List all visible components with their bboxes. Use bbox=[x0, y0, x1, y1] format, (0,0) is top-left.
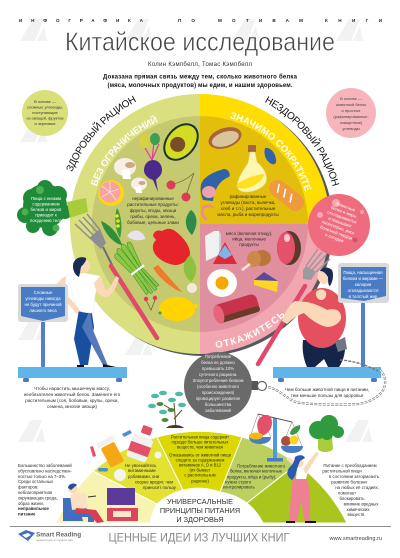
logo: ценные идеи из лучших книг bbox=[36, 538, 73, 542]
icon: red pepper bbox=[153, 229, 190, 265]
circle: healthy diet note: В основе — bbox=[34, 99, 56, 104]
text: control protein: контролировать bbox=[223, 484, 256, 490]
text: plant diet: помогает bbox=[338, 490, 356, 496]
icon: small berries bbox=[144, 296, 157, 310]
sector: vitamins bbox=[93, 437, 183, 504]
text: heredity: ностью только на 7–3%. bbox=[18, 474, 66, 479]
panel: plate bbox=[70, 94, 333, 356]
lead text bbox=[103, 74, 298, 89]
text: heredity: Среди остальных bbox=[18, 479, 54, 484]
sausage slice with note: Животные bbox=[335, 201, 357, 213]
icon: shrimp bbox=[202, 206, 213, 219]
icon: salami bbox=[211, 293, 261, 325]
sign: left scale: лишнего веса bbox=[29, 308, 57, 313]
weight: protein note: Злоупотребление белком bbox=[193, 378, 243, 383]
icon: cherries bbox=[166, 173, 194, 202]
header line bbox=[19, 18, 382, 23]
text: plant diet: на любых её стадиях, bbox=[335, 485, 379, 490]
text: vitamins: витаминными bbox=[128, 468, 156, 473]
text: heredity: образ жизни, bbox=[18, 501, 44, 506]
text: plant food: (их бывает bbox=[189, 468, 211, 472]
icon: carrot bbox=[153, 265, 182, 292]
text: plant food: Отказываясь от животной пищи bbox=[169, 452, 232, 458]
text: plant diet: растительной пищи bbox=[322, 468, 362, 474]
header line: КНИГИ bbox=[325, 18, 382, 23]
right fork bbox=[258, 249, 330, 364]
icon: tv bbox=[107, 488, 138, 521]
sector: plant food bbox=[157, 431, 242, 492]
text: heredity: питание bbox=[18, 512, 36, 517]
footer url: www.smartreading.ru bbox=[328, 536, 382, 542]
header line: МОТИВАМ bbox=[218, 18, 303, 23]
text: muscle mass: семена, многие овощи) bbox=[47, 404, 97, 409]
circle: unhealthy diet note bbox=[326, 88, 376, 138]
text: muscle mass bbox=[24, 386, 121, 409]
circle: healthy diet note bbox=[22, 90, 68, 136]
broccoli with note: похудению тела bbox=[30, 218, 63, 223]
sausage slice with note: и повышают bbox=[328, 216, 352, 229]
label: no limits: БЕЗ ОГРАНИЧЕНИЙ bbox=[90, 114, 158, 186]
weight: protein note: Потребление bbox=[205, 354, 232, 359]
header line: ПО bbox=[178, 18, 195, 23]
sign: left scale: углеводы никогда bbox=[25, 296, 61, 301]
text: plant diet: влияние вредных bbox=[344, 502, 379, 506]
woman figure bbox=[282, 268, 347, 367]
icon: man watching tv bbox=[63, 484, 104, 523]
text: plant diet bbox=[322, 463, 380, 517]
weight: protein note: происхождения) bbox=[202, 390, 235, 395]
icon: chicken leg bbox=[242, 250, 271, 270]
sausage slice with note: болезней сердца bbox=[319, 224, 354, 241]
broccoli with note: белков и жиров bbox=[31, 207, 62, 212]
title: Китайское исследование bbox=[65, 26, 335, 56]
circle: unhealthy diet note: и простые bbox=[342, 108, 361, 113]
icon: broccoli stalk on fork bbox=[67, 198, 88, 218]
text: vitamins bbox=[125, 463, 177, 490]
text: control protein: продукты, яйца и (рыбу), bbox=[227, 474, 276, 480]
icon: bread bbox=[206, 123, 244, 153]
text: plant diet: блокировать bbox=[339, 496, 365, 501]
icon: fried egg bbox=[207, 269, 237, 297]
text: heredity: неправильное bbox=[18, 506, 49, 511]
circle: healthy diet note: сложные углеводы, bbox=[27, 104, 63, 110]
icon: mushroom small bbox=[187, 283, 197, 293]
text: refined foods: углеводы (паста, выпечка, bbox=[220, 200, 276, 205]
text: plant food bbox=[169, 434, 232, 484]
sign: right scale: Пища, насыщенная bbox=[343, 270, 383, 275]
text: muscle mass: необязателен животный белок. Замените его bbox=[24, 391, 121, 397]
circle: unhealthy diet note: В основе — bbox=[340, 96, 362, 101]
weight: protein note: (особенно животного bbox=[197, 384, 240, 389]
text: vitamins: добавками, они bbox=[128, 474, 160, 479]
left fork bbox=[75, 214, 157, 338]
text: unrefined foods bbox=[127, 196, 179, 225]
text: plant diet: веществ bbox=[348, 512, 365, 517]
text: plant food: витаминов А, D и B12 bbox=[179, 462, 222, 468]
sausage slice with note: и сосудов bbox=[324, 232, 345, 244]
sign: right scale bbox=[338, 263, 389, 368]
sector: plant diet bbox=[247, 464, 347, 523]
icon: steak bbox=[277, 231, 301, 265]
text: plant food: веществ, чем животная bbox=[177, 444, 223, 450]
fan heading bbox=[160, 497, 240, 524]
icon: pills bbox=[90, 430, 162, 481]
footer slogan: ЦЕННЫЕ ИДЕИ ИЗ ЛУЧШИХ КНИГ bbox=[108, 532, 290, 544]
text: unrefined foods: нерафинированные bbox=[132, 196, 174, 201]
text: plant diet: Питание с преобладанием bbox=[323, 463, 377, 468]
icon: sausage fish bbox=[201, 169, 230, 201]
text: refined foods: хлеб и т.п.), растительные bbox=[221, 206, 276, 211]
text: heredity: неблагоприятная bbox=[18, 490, 53, 495]
weight: protein note: провоцирует развитие bbox=[196, 396, 241, 401]
sign: left scale: Сложные bbox=[34, 290, 53, 295]
weight: protein note: белка не должно bbox=[201, 360, 235, 365]
fan heading: УНИВЕРСАЛЬНЫЕ bbox=[167, 497, 233, 506]
text: plant diet: химических bbox=[346, 507, 370, 512]
text: plant food: гораздо больше питательных bbox=[171, 440, 229, 444]
icon: mushrooms bbox=[114, 158, 147, 193]
text: animal food harm: Чем больше животной пищи в питании, bbox=[285, 386, 369, 392]
authors: Колин Кэмпбелл, Томас Кэмпбелл bbox=[148, 62, 252, 68]
man figure bbox=[55, 257, 119, 367]
platform: right scale bbox=[273, 367, 381, 382]
text: plant diet: в состоянии затормозить bbox=[329, 474, 380, 479]
lead text: Доказана прямая связь между тем, сколько животного белка bbox=[103, 74, 298, 80]
text: muscle mass: растительным (соя, бобовые, крупы, орехи, bbox=[25, 398, 119, 403]
text: plant food: Растительная пища содержит bbox=[171, 434, 229, 440]
text: control protein: белка, включая молочные bbox=[230, 468, 283, 474]
text: control protein: Потребление животного bbox=[237, 464, 286, 468]
weight: protein note: суточного рациона. bbox=[199, 372, 237, 377]
sausage slice with note bbox=[308, 194, 370, 256]
sausage slice with note: откладываются bbox=[327, 209, 358, 225]
broccoli with note: приводит к bbox=[35, 212, 57, 218]
icon: garlic bbox=[127, 231, 145, 240]
icon: pea pod bbox=[101, 208, 122, 245]
sector: control protein bbox=[220, 437, 297, 503]
logo: Smart Reading bbox=[36, 532, 81, 538]
text: heredity: окружающая среда, bbox=[18, 495, 58, 500]
icon: balance scale bbox=[249, 414, 303, 462]
label: unhealthy diet: НЕЗДОРОВЫЙ РАЦИОН bbox=[265, 96, 340, 186]
weight: protein note: большинства bbox=[205, 402, 232, 407]
circle: healthy diet note: из овощей, фруктов bbox=[26, 116, 64, 120]
text: vitamins: Не увлекайтесь bbox=[125, 463, 157, 468]
text: animal food harm bbox=[285, 386, 369, 398]
icon: cheese bbox=[254, 272, 278, 292]
text: refined foods bbox=[217, 194, 279, 217]
icon: beet bbox=[139, 133, 162, 192]
icon: grapefruit bbox=[98, 180, 124, 206]
text: unrefined foods: фрукты, ягоды, овощи bbox=[130, 208, 177, 213]
text: heredity: обусловлено наследствен- bbox=[18, 468, 72, 473]
text: meat and dairy: яйца, молочные bbox=[232, 236, 266, 242]
sign: right scale: в толстый жир bbox=[349, 294, 378, 299]
label: refuse: ОТКАЖИТЕСЬ bbox=[216, 313, 284, 348]
sign: right scale: откладываются bbox=[348, 288, 379, 293]
text: meat and dairy: мясо (включая птицу), bbox=[226, 231, 272, 236]
text: refined foods: рафинированные bbox=[230, 194, 267, 199]
text: plant diet: развитие болезни bbox=[331, 480, 367, 484]
text: plant food: рационе) bbox=[191, 478, 209, 484]
icon: asparagus bunch bbox=[111, 239, 163, 298]
weight: protein note bbox=[184, 352, 266, 420]
text: heredity: факторов: bbox=[18, 485, 38, 490]
broccoli with note bbox=[17, 180, 72, 236]
sign: left scale: не будут причиной bbox=[24, 302, 62, 307]
header line: ИНФОГРАФИКА bbox=[19, 18, 144, 23]
chain bbox=[268, 360, 385, 405]
circle: healthy diet note: и зерновых bbox=[34, 121, 56, 126]
text: vitamins: скорее вредят, чем bbox=[135, 480, 173, 484]
text: animal food harm: тем меньше пользы для здоровья bbox=[291, 393, 364, 398]
icon: leaf small bbox=[184, 255, 196, 282]
icon: blue snack bbox=[264, 148, 276, 164]
text: refined foods: масла, рыба и морепродукты bbox=[217, 212, 279, 217]
text: muscle mass: Чтобы нарастить мышечную массу, bbox=[34, 386, 110, 391]
icon: milk carton bbox=[205, 231, 221, 261]
fan heading: И ЗДОРОВЬЯ bbox=[176, 515, 224, 524]
sign: right scale: белком и жирами — bbox=[343, 276, 384, 281]
text: heredity bbox=[18, 463, 72, 517]
label: healthy diet: ЗДОРОВЫЙ РАЦИОН bbox=[66, 96, 136, 172]
circle: unhealthy diet note: животный белок bbox=[336, 102, 366, 107]
sign: left scale bbox=[18, 284, 68, 368]
panel: principles fan bbox=[56, 431, 347, 523]
text: meat and dairy: продукты bbox=[239, 242, 259, 247]
icon: plant bbox=[148, 391, 186, 428]
weight: protein note: заболеваний bbox=[205, 408, 232, 413]
text: control protein: нужно строго bbox=[225, 480, 252, 484]
broccoli with note: Пища с низким bbox=[31, 196, 61, 201]
icon: pill bottle orange bbox=[96, 435, 126, 469]
circle: healthy diet note: поступающие bbox=[32, 110, 58, 115]
icon: triangle pack bbox=[213, 242, 237, 264]
icon: avocado bbox=[156, 116, 206, 168]
text: vitamins: приносят пользу bbox=[143, 485, 177, 490]
text: plant food: с растительным bbox=[184, 472, 216, 478]
sign: right scale: калории bbox=[355, 282, 372, 287]
circle: unhealthy diet note: очищенные) bbox=[340, 120, 363, 125]
platform: left scale bbox=[18, 367, 127, 382]
text: unrefined foods: бобовые, цельные злаки bbox=[127, 220, 179, 225]
icon: large broccoli bbox=[309, 415, 344, 452]
woman with broccoli bbox=[286, 452, 319, 523]
icon: leaf bbox=[186, 210, 196, 235]
sausage slice with note: холестерин, риск bbox=[321, 219, 355, 236]
sector: heredity bbox=[56, 471, 157, 523]
lead text: (мяса, молочных продуктов) мы едим, и нашим здоровьем. bbox=[108, 83, 293, 89]
text: heredity: Большинство заболеваний bbox=[18, 463, 72, 468]
logo bbox=[18, 530, 81, 542]
text: plant food: следите за содержанием bbox=[176, 458, 225, 462]
text: unrefined foods: растительные продукты: bbox=[127, 202, 179, 207]
circle: unhealthy diet note: углеводы bbox=[342, 126, 360, 131]
text: control protein bbox=[223, 464, 286, 490]
broccoli with note: содержанием bbox=[32, 202, 60, 206]
icon: vitamin bottle red bbox=[126, 423, 158, 463]
circle: unhealthy diet note: (рафинированные, bbox=[333, 114, 369, 119]
fan heading: ПРИНЦИПЫ ПИТАНИЯ bbox=[160, 506, 240, 515]
sausage slice with note: белки и жиры bbox=[330, 205, 357, 219]
icon: lemon bbox=[158, 297, 198, 321]
weight: protein note: превышать 10% bbox=[202, 366, 234, 371]
footer rule bbox=[10, 526, 391, 527]
icon: baguette bbox=[266, 176, 308, 214]
icon: oil bottle bbox=[236, 145, 267, 192]
text: unrefined foods: грибы, орехи, зелень, bbox=[130, 214, 176, 219]
label: reduce: ЗНАЧИМО СОКРАТИТЕ bbox=[230, 112, 312, 192]
text: meat and dairy bbox=[226, 231, 272, 247]
